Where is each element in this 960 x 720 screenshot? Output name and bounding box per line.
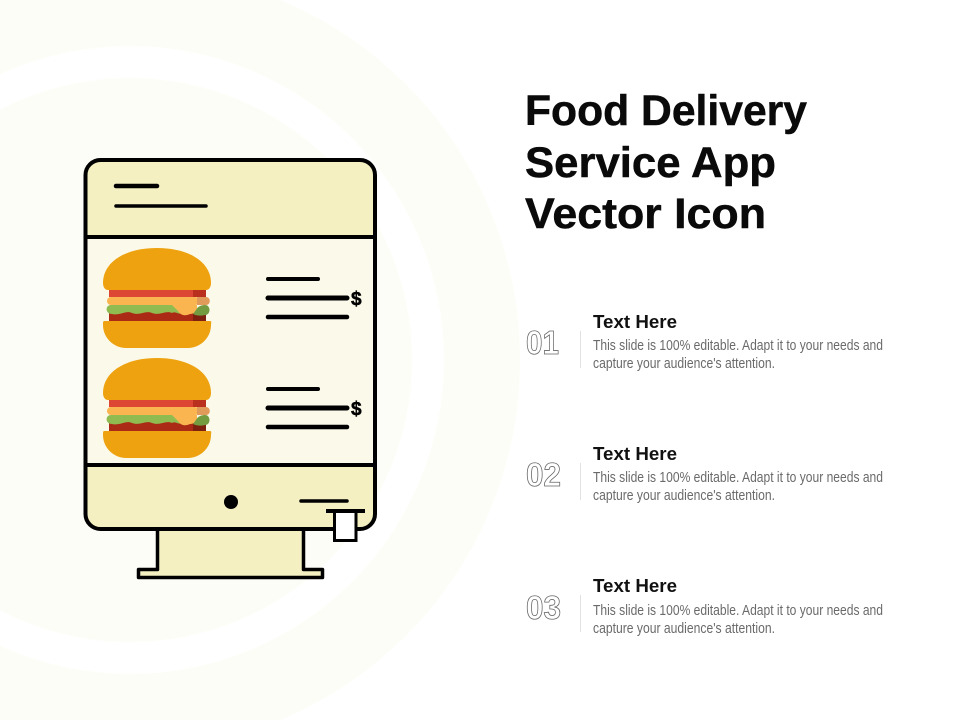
header text lines bbox=[116, 186, 206, 206]
body 03: This slide is 100% editable. Adapt it to your needs and bbox=[593, 603, 883, 619]
burger 2 price symbol: $ bbox=[351, 399, 362, 420]
footer line bbox=[301, 499, 347, 503]
body 02: capture your audience's attention. bbox=[593, 488, 775, 504]
body 01: capture your audience's attention. bbox=[593, 356, 775, 372]
divider 02 bbox=[580, 463, 581, 500]
title bbox=[525, 87, 807, 238]
body 03 bbox=[593, 603, 883, 637]
body 03: capture your audience's attention. bbox=[593, 621, 775, 637]
footer home button bbox=[224, 495, 238, 509]
screen body bbox=[86, 160, 375, 529]
number 01: 01 bbox=[526, 324, 559, 361]
heading 02: Text Here bbox=[593, 444, 677, 464]
number 02: 02 bbox=[526, 456, 561, 493]
body 02 bbox=[593, 470, 883, 504]
icon: food delivery app monitor bbox=[86, 160, 375, 578]
body 01 bbox=[593, 338, 883, 372]
body 01: This slide is 100% editable. Adapt it to your needs and bbox=[593, 338, 883, 354]
title: Service App bbox=[525, 139, 776, 187]
burger 1 price lines bbox=[268, 279, 347, 317]
heading 01: Text Here bbox=[593, 312, 677, 332]
number 03: 03 bbox=[526, 589, 561, 626]
body 02: This slide is 100% editable. Adapt it to your needs and bbox=[593, 470, 883, 486]
list item 02 bbox=[526, 444, 883, 504]
screen outline and dividers bbox=[86, 160, 375, 529]
screen footer band bbox=[86, 465, 375, 529]
list item 03 bbox=[526, 576, 883, 637]
monitor stand bbox=[138, 528, 322, 578]
burger 1 bbox=[103, 248, 211, 348]
card slot with white card bbox=[326, 511, 365, 540]
background concentric circles bbox=[0, 0, 520, 720]
divider 01 bbox=[580, 331, 581, 368]
divider 03 bbox=[580, 595, 581, 632]
list item 01 bbox=[526, 312, 883, 372]
title: Vector Icon bbox=[525, 190, 766, 238]
burger 1 price symbol: $ bbox=[351, 289, 362, 310]
burger 2 price lines bbox=[268, 389, 347, 427]
screen header band bbox=[86, 160, 375, 237]
burger 2 bbox=[103, 358, 211, 458]
title: Food Delivery bbox=[525, 87, 807, 135]
heading 03: Text Here bbox=[593, 576, 677, 596]
